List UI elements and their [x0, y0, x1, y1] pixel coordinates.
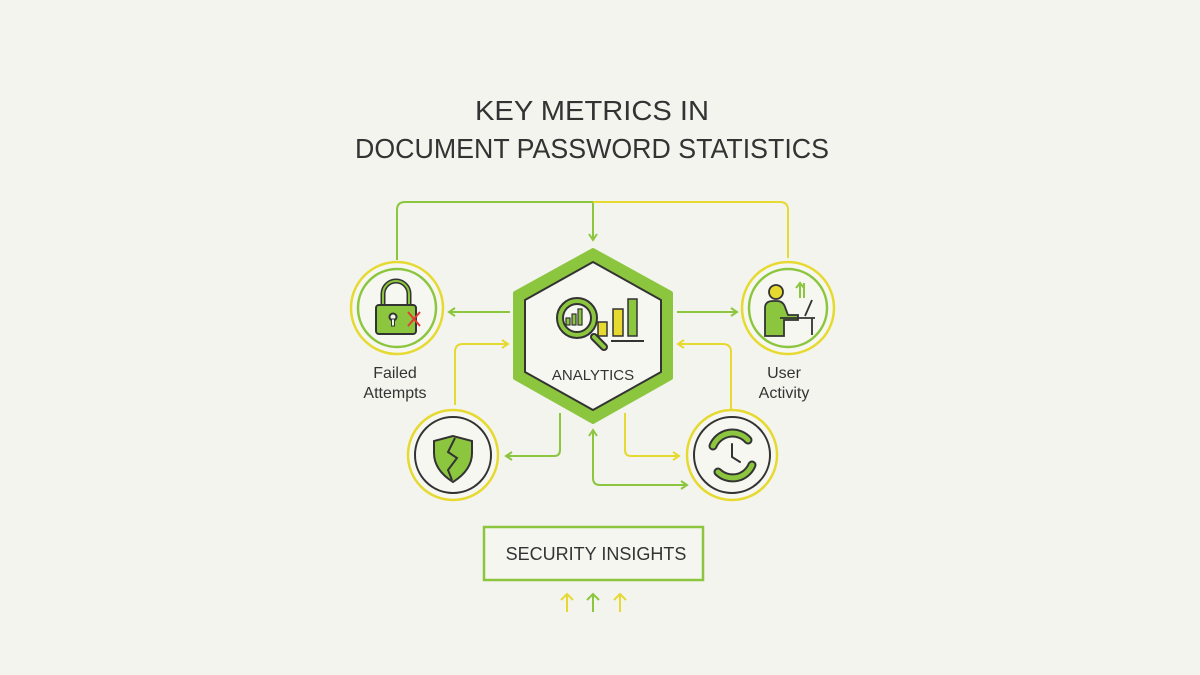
node: user activity — [742, 262, 834, 402]
node: user activity: Activity — [759, 385, 809, 402]
box: security insights — [484, 527, 703, 580]
icon: clock with circular arrows — [713, 433, 752, 478]
icon: magnifier with bar chart — [557, 298, 644, 347]
icon: user at desk — [765, 283, 815, 336]
label: user activity: User — [767, 365, 802, 382]
title: DOCUMENT PASSWORD STATISTICS — [355, 133, 829, 164]
title — [355, 95, 829, 164]
icon: broken shield — [434, 436, 472, 482]
title: KEY METRICS IN — [475, 95, 709, 126]
label: failed attempts: Failed — [373, 365, 417, 382]
node: broken shield — [408, 410, 498, 500]
box: security insights: SECURITY INSIGHTS — [506, 544, 686, 564]
node: clock history — [687, 410, 777, 500]
node: failed attempts — [351, 262, 443, 402]
arrows: up indicators — [561, 594, 626, 612]
icon: lock with x — [376, 281, 420, 334]
label: analytics: ANALYTICS — [552, 367, 634, 384]
connector arrows — [397, 202, 788, 485]
node: failed attempts: Attempts — [363, 385, 427, 402]
hexagon: analytics — [515, 250, 671, 422]
